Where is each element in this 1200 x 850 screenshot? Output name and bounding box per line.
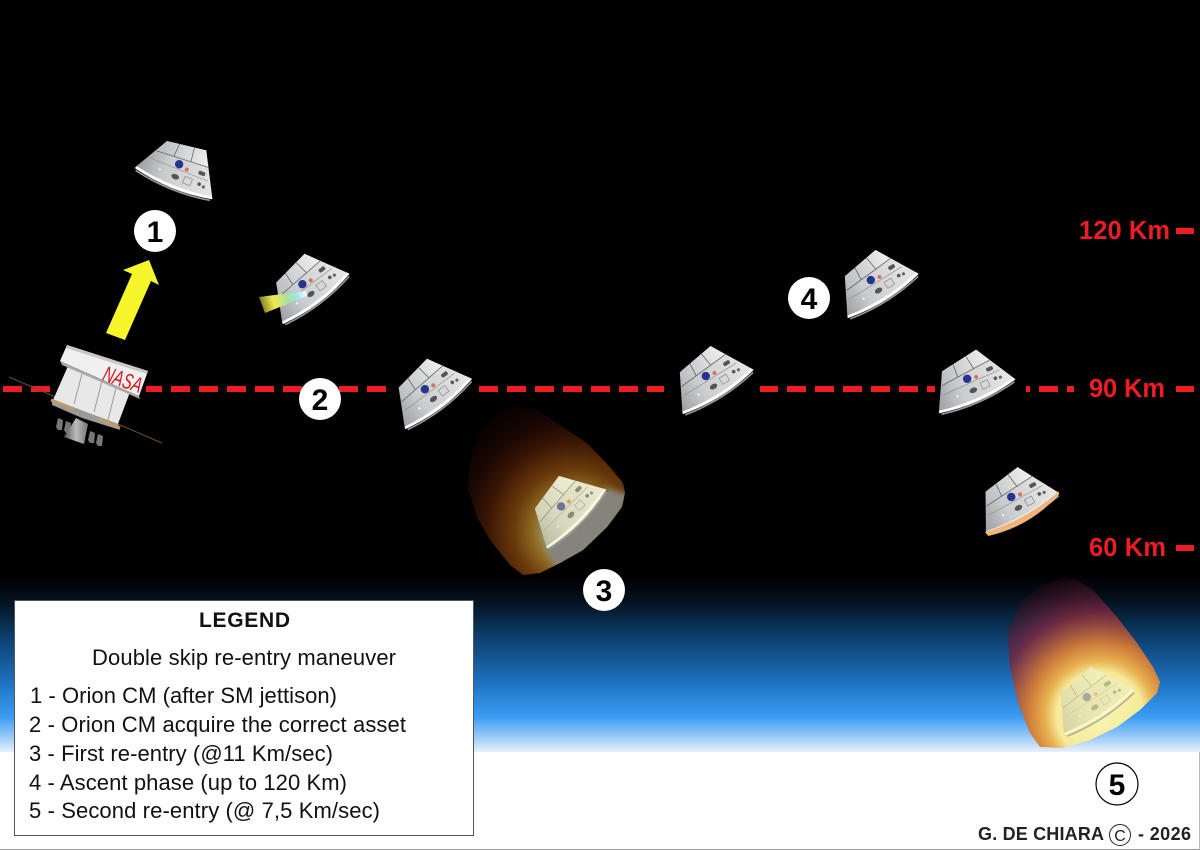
- legend heading: LEGEND: [199, 609, 290, 632]
- capsule: descending through 90 Km: [921, 340, 1018, 419]
- marker 5: 5: [1109, 769, 1125, 802]
- background: ground: [0, 752, 1200, 850]
- arrow: yellow direction arrow: [106, 260, 159, 340]
- marker 5: [1096, 763, 1138, 805]
- author credit: [978, 824, 1191, 846]
- first re-entry capsule with plasma glow: [468, 405, 630, 575]
- altitude label: 120 Km: 120 Km: [1079, 217, 1170, 245]
- spacecraft: Orion with service module and NASA logo: [9, 345, 162, 446]
- dashed 90 Km altitude line: [3, 386, 1074, 392]
- marker 1: 1: [147, 216, 163, 249]
- marker 3: [583, 569, 625, 611]
- spacecraft: Orion with service module and NASA logo: NASA: [100, 361, 146, 398]
- marker 2: [299, 378, 341, 420]
- thruster plume: [259, 291, 307, 313]
- legend entries: 5 - Second re-entry (@ 7,5 Km/sec): [29, 798, 380, 823]
- capsule: ascent phase: [825, 237, 922, 323]
- background: atmosphere gradient: [0, 575, 1200, 752]
- capsule: Orion CM firing thruster: [257, 239, 353, 329]
- capsule: heating at 60 Km: [965, 456, 1064, 541]
- marker 1: [134, 210, 176, 252]
- marker 3: 3: [596, 575, 612, 608]
- altitude label: 60 Km: 60 Km: [1089, 534, 1166, 562]
- legend panel: [14, 600, 474, 836]
- legend entries: 1 - Orion CM (after SM jettison): [30, 683, 337, 708]
- altitude label: 90 Km: 90 Km: [1089, 375, 1165, 403]
- capsule: on the 90 Km line, rising: [660, 333, 757, 419]
- author credit: - 2026: [1138, 824, 1191, 844]
- capsule: acquiring attitude on the 90 Km line: [379, 344, 476, 434]
- capsule: Orion CM after SM jettison: [132, 128, 229, 205]
- second re-entry capsule with plasma glow: [1007, 577, 1160, 748]
- marker 2: 2: [312, 384, 328, 417]
- legend entries: 3 - First re-entry (@11 Km/sec): [29, 741, 333, 766]
- author credit: G. DE CHIARA: [978, 824, 1104, 844]
- legend entries: 4 - Ascent phase (up to 120 Km): [29, 770, 347, 795]
- author credit: C: [1114, 828, 1126, 845]
- marker 4: [788, 277, 830, 319]
- legend entries: 2 - Orion CM acquire the correct asset: [29, 712, 406, 737]
- marker 4: 4: [801, 283, 818, 316]
- legend subtitle: Double skip re-entry maneuver: [92, 645, 396, 670]
- legend entries: [29, 683, 406, 823]
